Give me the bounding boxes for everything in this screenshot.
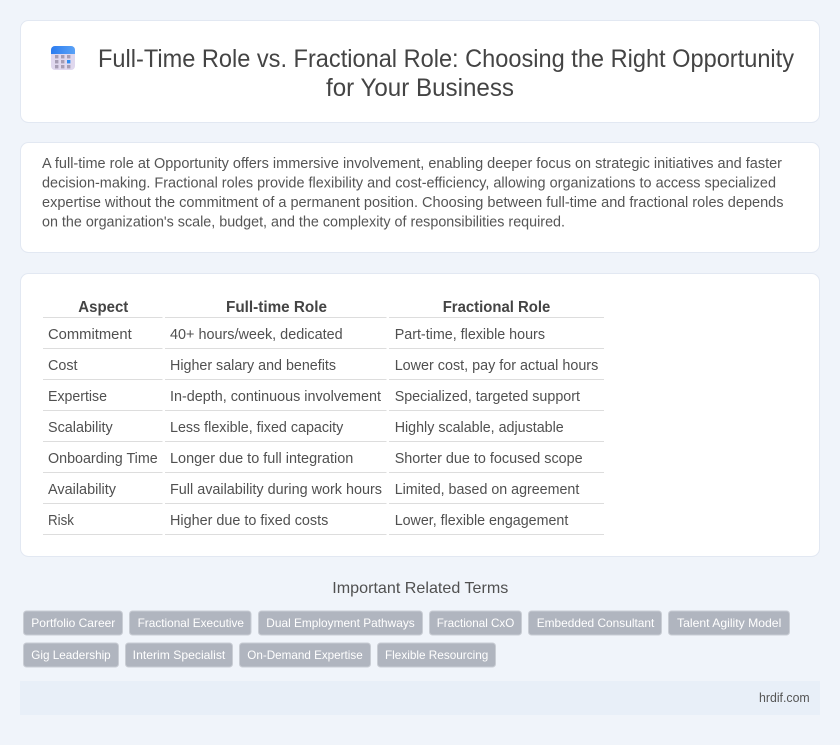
tag: embedded consultant	[528, 611, 662, 635]
table row: scalability	[43, 420, 604, 442]
text block: introduction paragraph	[42, 156, 784, 230]
tag: fractional executive	[130, 611, 251, 635]
tag: flexible resourcing	[378, 643, 496, 667]
table row: cost: Higher salary and benefits	[170, 358, 336, 374]
icon: calendar	[51, 46, 75, 70]
tag: fractional cxo: Fractional CxO	[437, 616, 514, 630]
table row: expertise: Expertise	[48, 389, 107, 405]
text block: introduction paragraph: decision-making. Fractional roles provide flexibility and cost-efficiency, allowing organizations to access specialized	[42, 176, 776, 192]
tag: talent agility model: Talent Agility Model	[677, 616, 781, 630]
table row: scalability: Less flexible, fixed capacity	[170, 420, 344, 436]
table row: cost: Lower cost, pay for actual hours	[395, 358, 598, 374]
footer source text: hrdif.com	[759, 690, 810, 705]
panel: related terms	[24, 580, 790, 667]
footer	[20, 681, 820, 715]
tag: gig leadership	[24, 643, 118, 667]
table header row: Full-time Role	[226, 299, 327, 316]
tag: portfolio career: Portfolio Career	[31, 616, 115, 630]
tag: fractional cxo	[430, 611, 522, 635]
table row: onboarding time	[43, 451, 604, 473]
title: for Your Business	[326, 74, 514, 102]
table row: availability	[43, 482, 604, 504]
table row: risk: Lower, flexible engagement	[395, 513, 568, 529]
tag: interim specialist	[126, 643, 232, 667]
tag: talent agility model	[668, 611, 790, 635]
text block: introduction paragraph: expertise without the commitment of a permanent position. Choosing between full-time and fractional roles depends	[42, 195, 784, 211]
tag: gig leadership: Gig Leadership	[31, 648, 111, 662]
table header row: Aspect	[78, 299, 129, 316]
table row: commitment: 40+ hours/week, dedicated	[170, 327, 343, 343]
table row: availability: Availability	[48, 482, 117, 498]
table row: scalability: Scalability	[48, 420, 113, 436]
table row: risk	[43, 513, 604, 535]
tag: dual employment pathways: Dual Employment Pathways	[266, 616, 415, 630]
table row: commitment: Commitment	[48, 327, 132, 343]
table row: expertise: In-depth, continuous involvement	[170, 389, 381, 405]
panel: introduction	[20, 142, 820, 252]
table row: expertise	[43, 389, 604, 411]
table row: availability: Limited, based on agreement	[395, 482, 579, 498]
tag: fractional executive: Fractional Executive	[138, 616, 244, 630]
table row: expertise: Specialized, targeted support	[395, 389, 580, 405]
text block: introduction paragraph: A full-time role at Opportunity offers immersive involvement, enabling deeper focus on strategic initiatives and faster	[42, 156, 782, 172]
table row: commitment	[43, 327, 604, 349]
table row: scalability: Highly scalable, adjustable	[395, 420, 564, 436]
tag: on-demand expertise	[240, 643, 370, 667]
table row: onboarding time: Onboarding Time	[48, 451, 158, 467]
panel: comparison table	[20, 274, 820, 556]
table header row	[43, 299, 604, 318]
table row: cost	[43, 358, 604, 380]
tag: on-demand expertise: On-Demand Expertise	[247, 648, 363, 662]
title	[98, 45, 794, 102]
title: Full-Time Role vs. Fractional Role: Choosing the Right Opportunity	[98, 45, 794, 73]
table row: onboarding time: Longer due to full integration	[170, 451, 353, 467]
table row: risk: Risk	[48, 513, 75, 529]
table header row: Fractional Role	[443, 299, 550, 316]
table row: risk: Higher due to fixed costs	[170, 513, 328, 529]
table row: availability: Full availability during work hours	[170, 482, 382, 498]
table row: commitment: Part-time, flexible hours	[395, 327, 545, 343]
tag: interim specialist: Interim Specialist	[133, 648, 226, 662]
tag: embedded consultant: Embedded Consultant	[537, 616, 655, 630]
heading: important related terms: Important Related Terms	[332, 580, 508, 597]
text block: introduction paragraph: on the organization's scale, budget, and the complexity of responsibilities required.	[42, 214, 565, 230]
panel: header	[20, 20, 820, 122]
table row: onboarding time: Shorter due to focused scope	[395, 451, 583, 467]
tag: dual employment pathways	[258, 611, 422, 635]
tag: portfolio career	[24, 611, 122, 635]
tag: flexible resourcing: Flexible Resourcing	[385, 648, 488, 662]
table row: cost: Cost	[48, 358, 78, 374]
